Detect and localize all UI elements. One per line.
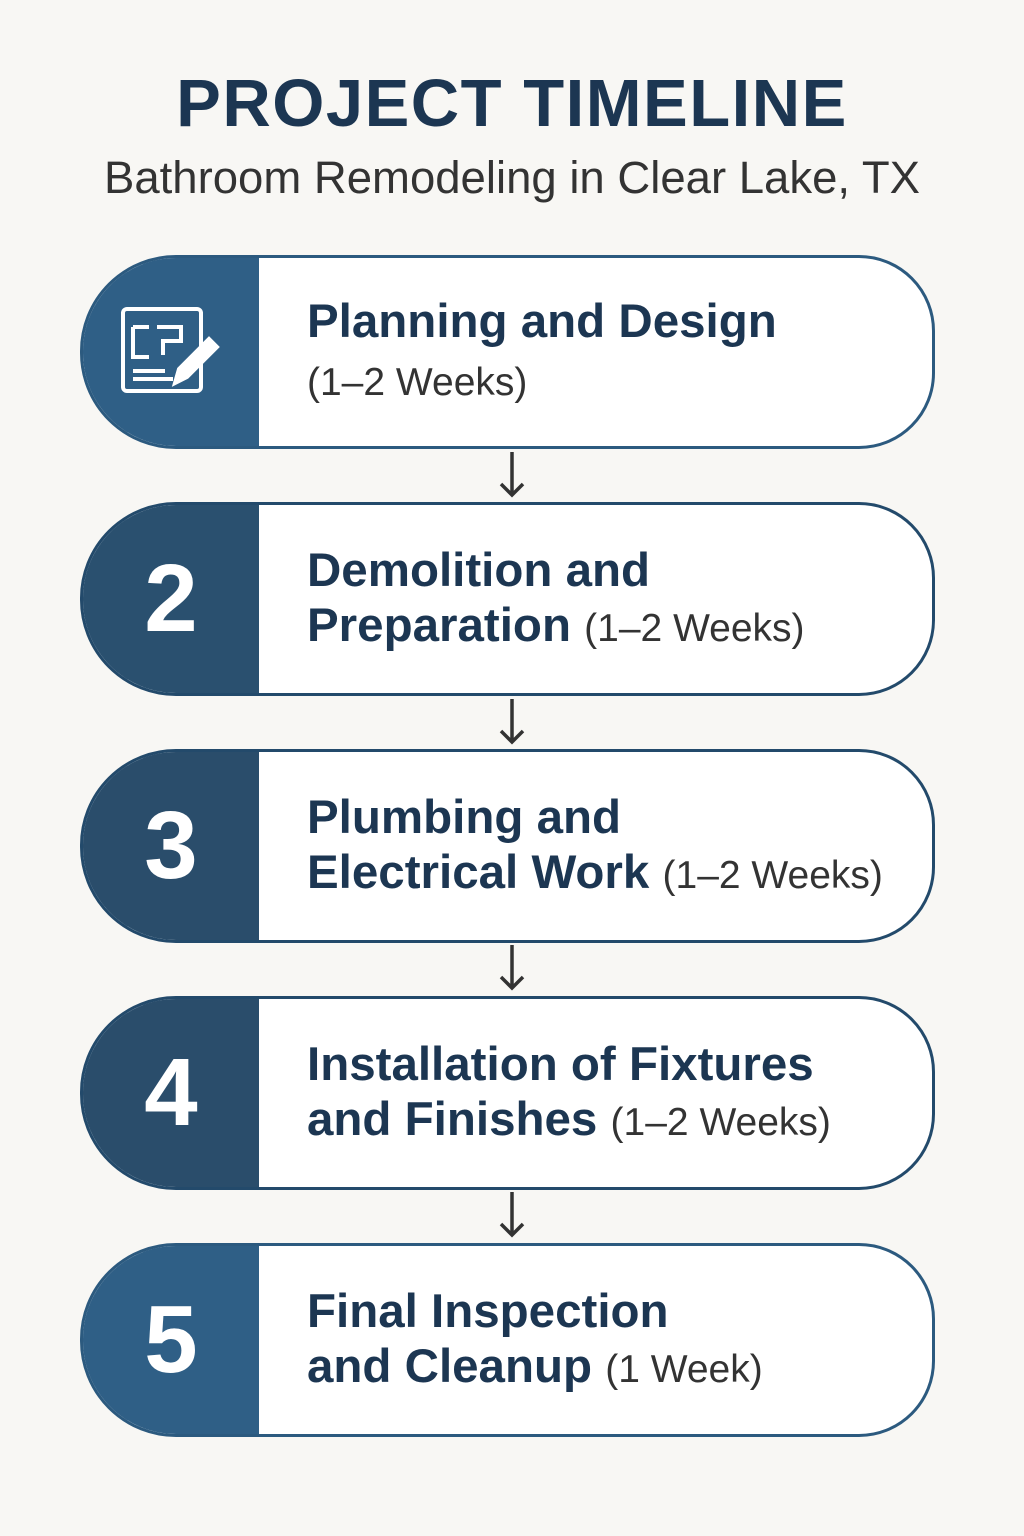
step 2 text <box>307 544 805 652</box>
number 4 <box>83 999 259 1187</box>
step 2 text: Demolition and <box>307 544 650 596</box>
title: PROJECT TIMELINE <box>176 66 848 141</box>
step 4 text <box>307 1038 831 1146</box>
number 4: 4 <box>144 1039 198 1146</box>
step 5 text: Final Inspection <box>307 1284 669 1338</box>
number 2: 2 <box>144 545 198 652</box>
step 2 text: Preparation (1–2 Weeks) <box>307 598 805 652</box>
step 4 text: Installation of Fixtures <box>307 1038 814 1090</box>
step 3 text: Electrical Work (1–2 Weeks) <box>307 846 883 898</box>
step 3 card <box>80 749 935 943</box>
step 3 text <box>307 790 883 898</box>
step 2 card <box>80 502 935 696</box>
number 3 <box>83 752 259 940</box>
step 1 text: Planning and Design <box>307 295 777 348</box>
step 4 text: and Finishes (1–2 Weeks) <box>307 1092 831 1146</box>
number 3: 3 <box>144 792 198 899</box>
number 2 <box>83 505 259 693</box>
arrow 1 <box>500 452 524 498</box>
step 5 text <box>307 1284 763 1392</box>
icon: plan with pencil <box>83 258 259 446</box>
step 4 card <box>80 996 935 1190</box>
arrow 3 <box>500 945 524 990</box>
step 1 text <box>307 295 777 404</box>
step 1 text: (1–2 Weeks) <box>307 361 527 404</box>
step 1 card <box>80 255 935 449</box>
number 5: 5 <box>144 1286 198 1393</box>
arrow 4 <box>500 1192 524 1238</box>
number 5 <box>83 1246 259 1434</box>
step 5 text: and Cleanup (1 Week) <box>307 1340 763 1392</box>
arrow 2 <box>500 699 524 744</box>
subtitle: Bathroom Remodeling in Clear Lake, TX <box>104 152 920 203</box>
step 5 card <box>80 1243 935 1437</box>
step 3 text: Plumbing and <box>307 790 621 844</box>
